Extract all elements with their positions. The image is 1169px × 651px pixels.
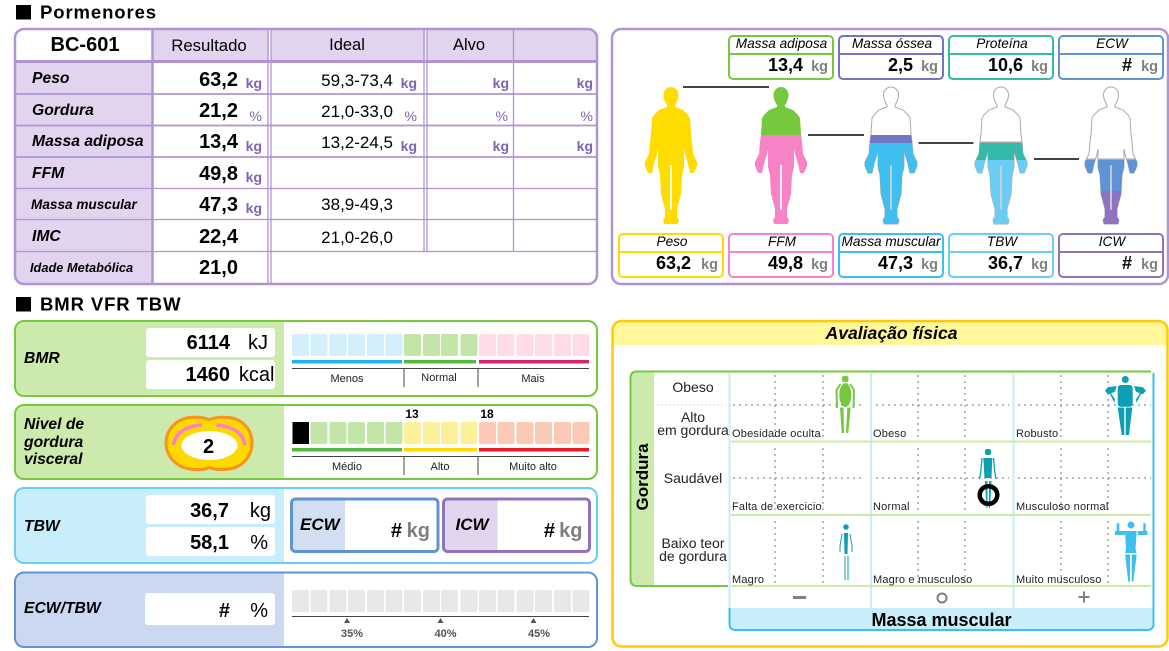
panel: TBW: 36,7 (190, 500, 229, 522)
value box: Proteína: Proteína (976, 36, 1028, 51)
panel: TBW: 58,1 (190, 532, 229, 554)
value box: Massa óssea: 2,5 (888, 55, 913, 75)
value box: TBW: kg (1031, 257, 1048, 273)
panel: BMR: kJ (248, 332, 268, 354)
assessment grid: Muito musculoso (1016, 574, 1102, 586)
table ideal column: 21,0-26,0 (321, 228, 393, 247)
table header row: BC-601 (51, 34, 119, 56)
table results column: kg (246, 75, 262, 91)
heading: Pormenores: Pormenores (40, 2, 157, 22)
table row labels: Idade Metabólica (30, 260, 133, 275)
table results column: 13,4 (199, 131, 239, 153)
panel: TBW: TBW (24, 518, 61, 535)
value box: Massa óssea (839, 36, 943, 79)
figure: normal (980, 449, 996, 508)
figure: muscle and bone (864, 86, 918, 224)
panel: BMR: BMR (24, 350, 60, 367)
panel: visceral fat (15, 405, 597, 479)
assessment grid: Normal (873, 501, 910, 513)
value box: ICW (1059, 234, 1163, 277)
table target columns: % (496, 108, 508, 124)
table target columns: kg (493, 138, 509, 154)
table ideal column: kg (401, 138, 417, 154)
table target columns: kg (577, 75, 593, 91)
figure: hidden obesity (836, 376, 854, 433)
ECW box (292, 499, 438, 552)
value box: Proteína (949, 36, 1053, 79)
ECW/TBW scale bar (292, 590, 590, 640)
panel: body composition (612, 29, 1168, 284)
ICW box: ICW (456, 515, 490, 534)
table row labels: Massa adiposa (32, 133, 144, 150)
value box: TBW (949, 234, 1053, 277)
muscle axis (729, 373, 1154, 630)
value box: Massa muscular (839, 234, 943, 277)
fat axis (630, 372, 1151, 586)
value box: Peso: kg (701, 257, 718, 273)
value box: FFM: kg (811, 257, 828, 273)
value box: ECW: # (1122, 55, 1132, 75)
assessment title: Avaliação física (824, 323, 958, 343)
table row labels (30, 70, 144, 275)
fat axis: Gordura (633, 443, 652, 511)
table ideal column (321, 71, 417, 247)
table header row: Ideal (329, 36, 365, 54)
panel: BMR: kcal (239, 364, 274, 386)
fat axis: Obeso (672, 379, 714, 395)
table results column: % (250, 108, 262, 124)
value box: ECW: ECW (1096, 36, 1129, 51)
ECW box: ECW (300, 515, 342, 534)
ECW box: # (391, 520, 402, 542)
icon: abdominal cross-section (166, 417, 252, 470)
value box: Proteína: kg (1031, 59, 1048, 75)
ICW box (444, 499, 590, 552)
value box: Massa adiposa: Massa adiposa (736, 36, 828, 51)
value box: FFM: FFM (768, 234, 797, 249)
assessment grid: Falta de exercicio (732, 501, 822, 513)
fat axis: Alto (681, 409, 705, 425)
BMR scale bar (292, 334, 590, 387)
table results column: 49,8 (199, 163, 238, 185)
panel: BMR: 6114 (187, 332, 231, 354)
value box: TBW: TBW (987, 234, 1018, 249)
panel: ECW/TBW: % (250, 600, 268, 622)
table row labels: FFM (32, 165, 65, 182)
ICW box: kg (559, 520, 582, 542)
table results column: 22,4 (199, 226, 239, 248)
table results column: 21,0 (199, 257, 238, 279)
table results column: kg (246, 138, 262, 154)
muscle axis: Massa muscular (871, 610, 1012, 630)
assessment grid: Obesidade oculta (732, 428, 821, 440)
assessment grid: Obeso (873, 428, 906, 440)
table target columns: kg (493, 75, 509, 91)
assessment grid: Magro e musculoso (873, 574, 972, 586)
panel: ECW/TBW (15, 572, 597, 647)
figure: ECW and ICW (1084, 86, 1138, 224)
value box: Peso: Peso (657, 234, 688, 249)
value box: Massa adiposa: kg (811, 59, 828, 75)
table row labels: Peso (32, 70, 70, 87)
visceral fat scale bar: Médio (332, 461, 362, 473)
table header row: Alvo (453, 36, 485, 54)
table ideal column: 21,0-33,0 (321, 102, 393, 121)
figure: Peso (645, 87, 697, 224)
value box: Massa adiposa: 13,4 (768, 55, 803, 75)
visceral fat scale bar: Muito alto (509, 461, 557, 473)
table header row (51, 34, 485, 56)
table target columns: % (581, 108, 593, 124)
value box: ICW: ICW (1099, 234, 1126, 249)
table ideal column: % (405, 108, 417, 124)
panel: TBW (15, 488, 597, 563)
table results column: 63,2 (199, 69, 238, 91)
value box: Massa óssea: kg (921, 59, 938, 75)
assessment grid: Magro (732, 574, 764, 586)
table results column: 47,3 (199, 194, 238, 216)
value box: ECW (1059, 36, 1163, 79)
figure: very muscular (1115, 522, 1147, 582)
panel: BMR (15, 321, 597, 396)
visceral fat scale bar (292, 407, 590, 475)
fat axis: Saudável (664, 470, 722, 486)
value box: Massa adiposa (729, 36, 833, 79)
value box: Peso: 63,2 (656, 253, 691, 273)
table row labels: Gordura (32, 102, 94, 119)
value box: FFM (729, 234, 833, 277)
panel: visceral fat: gordura (23, 434, 84, 451)
visceral fat scale bar: 18 (480, 407, 494, 421)
figure: FFM and fat mass (755, 87, 807, 224)
table ideal column: 59,3-73,4 (321, 71, 393, 90)
table results column (199, 69, 262, 279)
table target columns (493, 75, 593, 154)
table results column: kg (246, 169, 262, 185)
fat axis: em gordura (657, 422, 729, 438)
panel: ECW/TBW: # (219, 600, 230, 622)
table row labels: Massa muscular (31, 197, 137, 212)
visceral fat scale bar: Alto (431, 461, 449, 473)
assessment grid: Musculoso normal (1016, 501, 1108, 513)
panel: physical assessment (612, 321, 1168, 646)
table row labels: IMC (32, 228, 61, 245)
figure: robust (1105, 376, 1146, 435)
panel: TBW: kg (250, 500, 271, 522)
table ideal column: 38,9-49,3 (321, 195, 393, 214)
assessment grid (730, 373, 1151, 608)
value box: FFM: 49,8 (768, 253, 803, 273)
BMR scale bar: Menos (330, 373, 364, 385)
BMR scale bar: Mais (521, 373, 545, 385)
fat axis: Baixo teor (661, 535, 725, 551)
connector lines (683, 87, 1079, 159)
icon: abdominal cross-section: 2 (203, 436, 214, 458)
fat axis: de gordura (659, 548, 727, 564)
table ideal column: kg (401, 75, 417, 91)
table ideal column: 13,2-24,5 (321, 133, 393, 152)
table results column: 21,2 (199, 100, 238, 122)
ECW/TBW scale bar: 40% (434, 628, 457, 640)
visceral fat scale bar: 13 (405, 407, 419, 421)
table target columns: kg (577, 138, 593, 154)
value box: Massa muscular: 47,3 (878, 253, 913, 273)
value box: ECW: kg (1141, 59, 1158, 75)
figure: protein and TBW (974, 86, 1028, 224)
panel: visceral fat: visceral (24, 451, 83, 468)
heading: BMR VFR TBW: BMR VFR TBW (40, 294, 181, 314)
ECW/TBW scale bar: 45% (528, 628, 550, 640)
table header row: Resultado (171, 36, 247, 55)
table results column: kg (246, 200, 262, 216)
panel: ECW/TBW: ECW/TBW (24, 600, 102, 617)
value box: TBW: 36,7 (988, 253, 1023, 273)
figure: thin (840, 524, 852, 580)
panel: TBW: % (250, 532, 268, 554)
assessment grid: Robusto (1016, 428, 1058, 440)
marker: current position ring (980, 486, 997, 504)
value box: Massa muscular: kg (921, 257, 938, 273)
value box: Proteína: 10,6 (988, 55, 1023, 75)
ECW/TBW scale bar: 35% (341, 628, 363, 640)
ICW box: # (544, 520, 555, 542)
panel: BMR: 1460 (186, 364, 230, 386)
value box: Massa óssea: Massa óssea (852, 36, 932, 51)
panel: visceral fat: Nivel de (24, 416, 84, 433)
value box: Peso (619, 234, 723, 277)
value box: Massa muscular: Massa muscular (842, 234, 941, 249)
value box: ICW: kg (1141, 257, 1158, 273)
panel: details table (15, 29, 597, 284)
ECW box: kg (407, 520, 430, 542)
value box: ICW: # (1122, 253, 1132, 273)
BMR scale bar: Normal (421, 372, 457, 384)
